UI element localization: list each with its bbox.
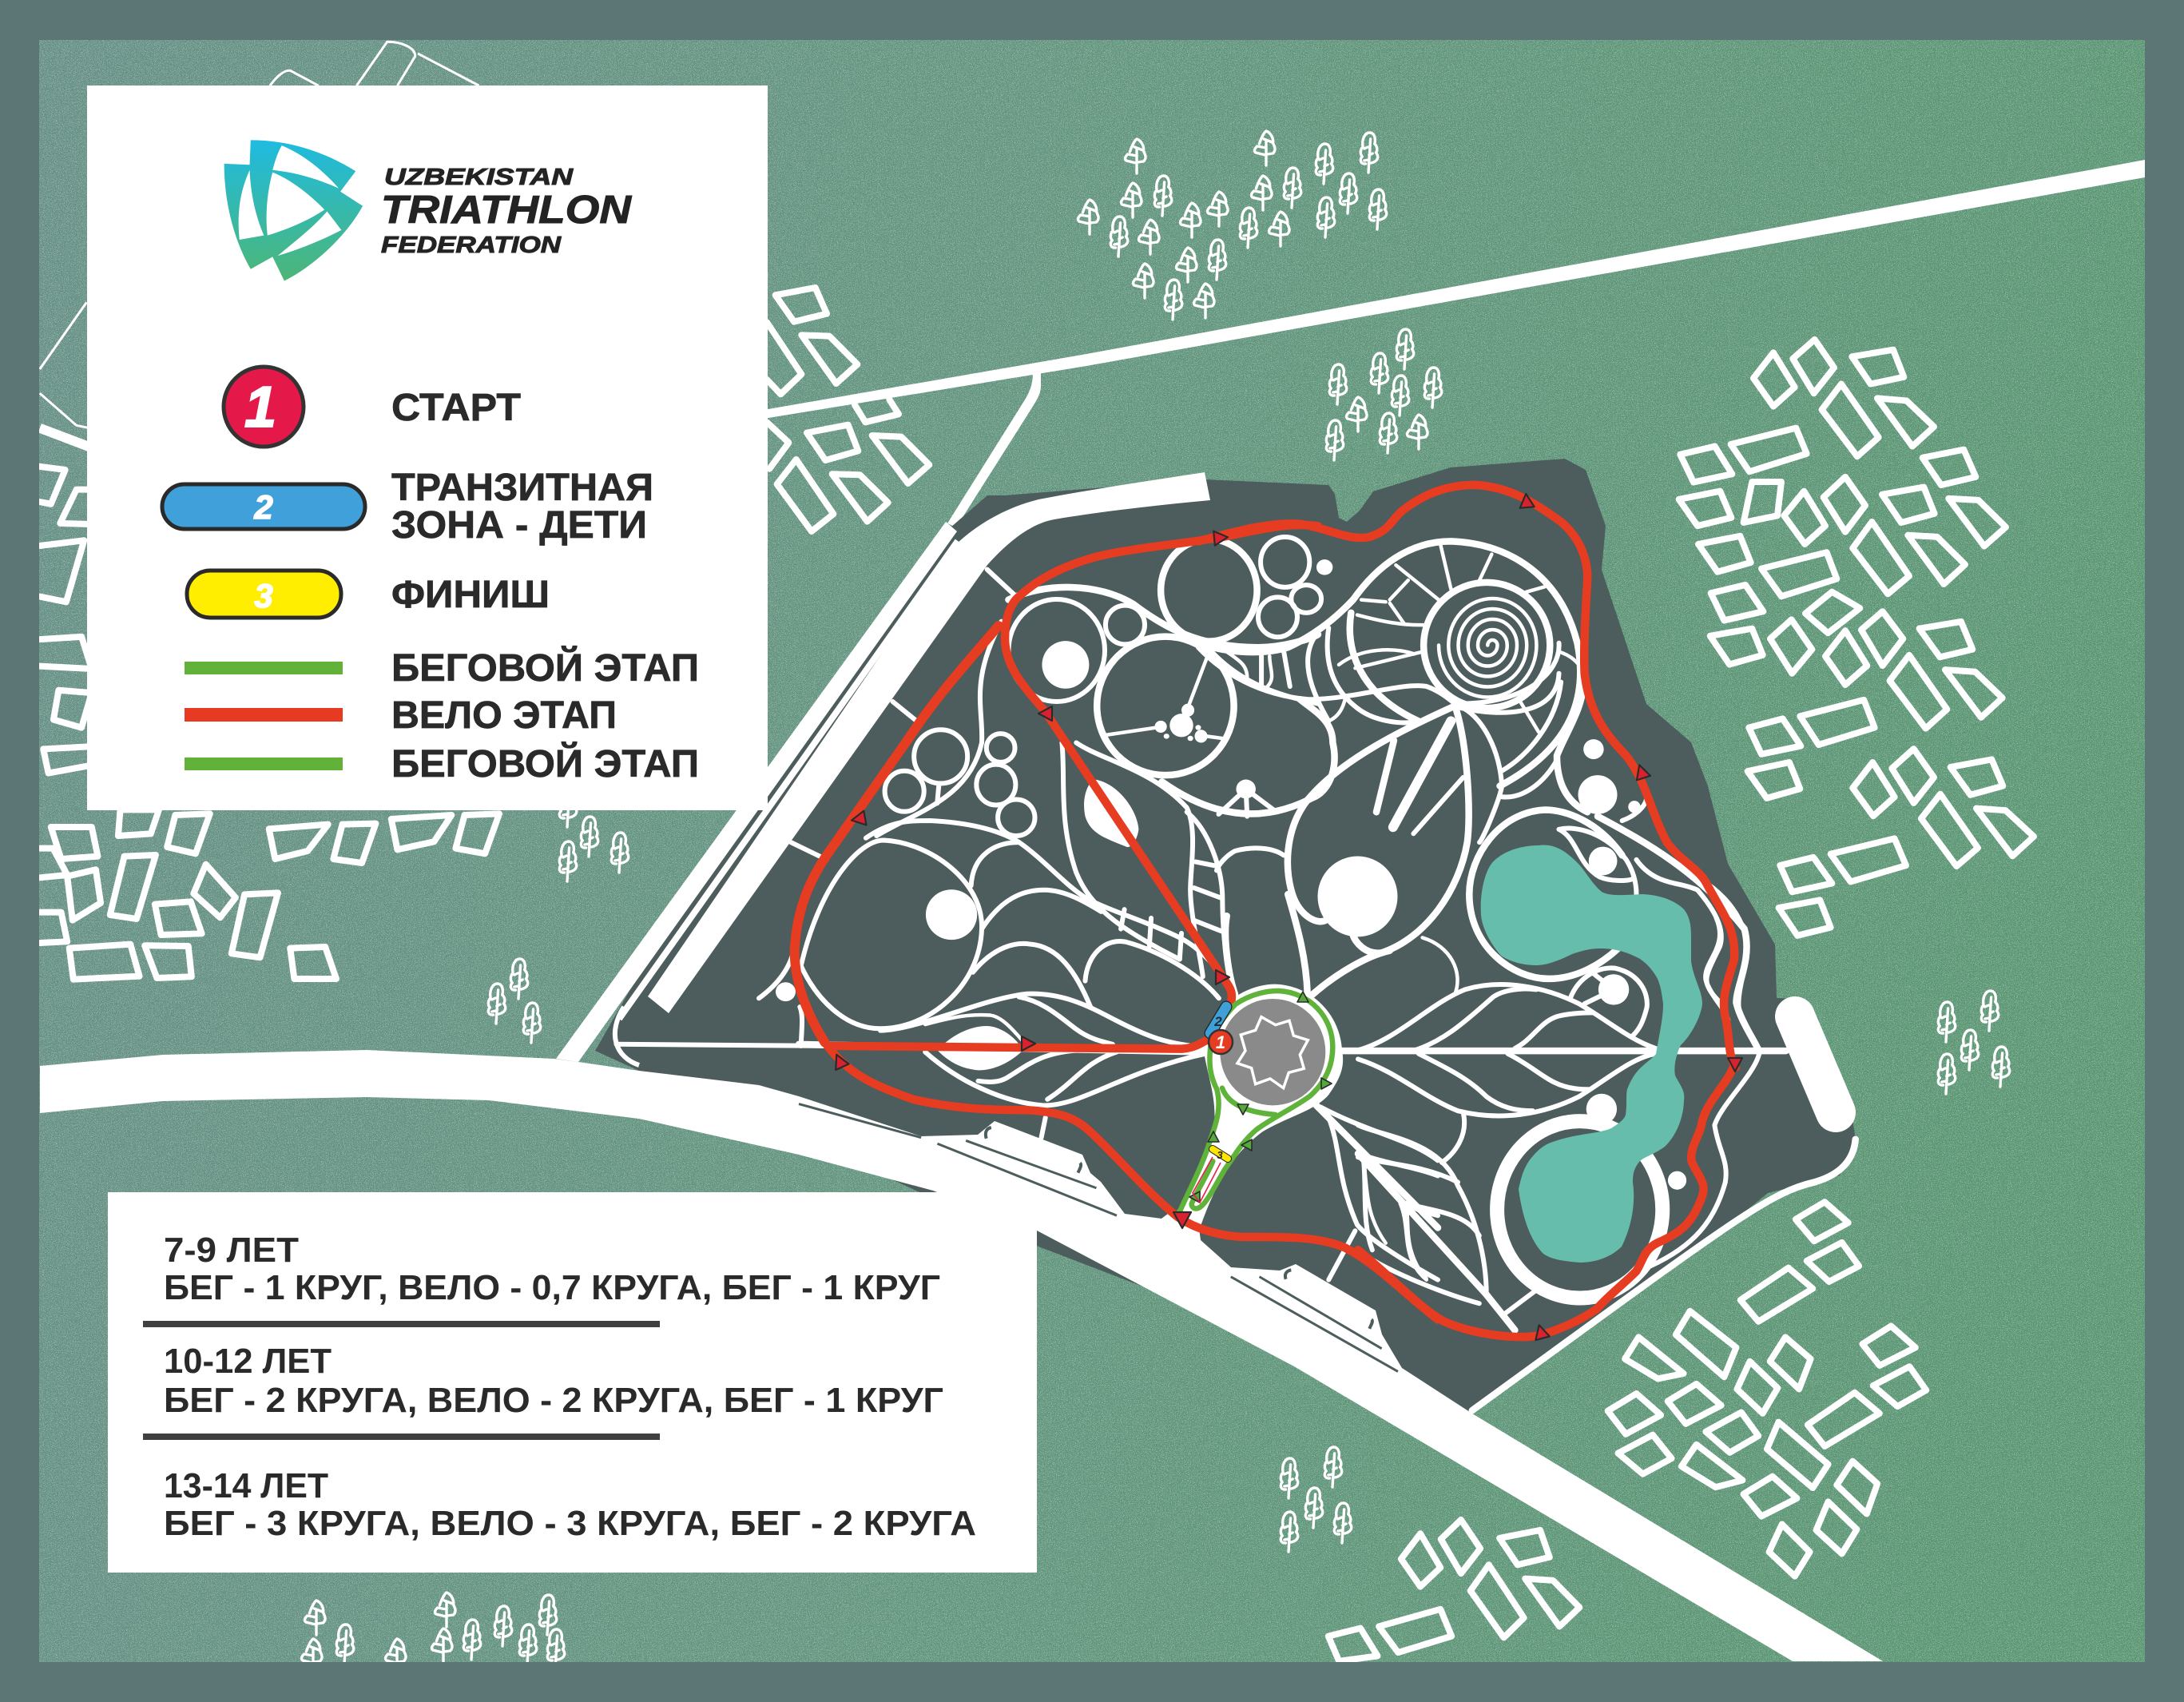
trees: north grove bbox=[1078, 131, 1387, 320]
age group 13-14: 13-14 ЛЕТ bbox=[164, 1466, 328, 1505]
logo wordmark: FEDERATION bbox=[381, 233, 562, 258]
road: eastern capsule road bbox=[1795, 1016, 1836, 1112]
legend row: transition zone: 2 bbox=[253, 488, 273, 526]
road: main southern highway bbox=[40, 1050, 1883, 1661]
logo wordmark: TRIATHLON bbox=[381, 189, 633, 232]
road: northern highway bbox=[759, 160, 2145, 527]
panel: age groups bbox=[108, 1192, 1037, 1573]
legend row: running stage 2: БЕГОВОЙ ЭТАП bbox=[391, 742, 699, 785]
legend row: cycling stage bbox=[185, 694, 617, 737]
marker 2: transition zone on map bbox=[1210, 1007, 1226, 1033]
age group 10-12: БЕГ - 2 КРУГА, ВЕЛО - 2 КРУГА, БЕГ - 1 КРУГ bbox=[164, 1381, 943, 1420]
park paths: south-west leaf and south sector bbox=[799, 994, 1438, 1280]
marker 3: finish on map bbox=[1193, 1149, 1228, 1203]
buildings: south-east clusters bbox=[1328, 1202, 1926, 1661]
route: cycling stage (red) bbox=[795, 485, 1735, 1337]
route direction arrows: green bbox=[1189, 992, 1332, 1203]
logo wordmark bbox=[381, 165, 633, 258]
trees: west grove bbox=[488, 787, 629, 1043]
buildings: north cluster near road bbox=[767, 288, 929, 531]
marker 3: finish on map: 3 bbox=[1217, 1149, 1223, 1161]
route: running stage (green) bbox=[1180, 991, 1332, 1212]
surrounding street thin lines bbox=[40, 42, 479, 447]
age group 13-14: БЕГ - 3 КРУГА, ВЕЛО - 3 КРУГА, БЕГ - 2 КРУГА bbox=[164, 1504, 976, 1543]
age group 7-9: БЕГ - 1 КРУГ, ВЕЛО - 0,7 КРУГА, БЕГ - 1 КРУГ bbox=[164, 1268, 940, 1307]
legend row: finish: ФИНИШ bbox=[391, 574, 550, 616]
legend row: start: 1 bbox=[244, 376, 276, 439]
park paths: north-east sector with spiral bbox=[1198, 537, 1759, 1050]
lake bbox=[1481, 845, 1702, 1263]
marker 1: start on map: 1 bbox=[1216, 1032, 1225, 1052]
marker 2: transition zone on map: 2 bbox=[1213, 1014, 1222, 1029]
central plaza: white teardrop road bbox=[1174, 984, 1343, 1225]
logo wordmark: UZBEKISTAN bbox=[384, 165, 574, 190]
route direction arrows: red bbox=[830, 493, 1742, 1340]
legend row: transition zone: ЗОНА - ДЕТИ bbox=[391, 504, 647, 547]
marker 1: start on map bbox=[1209, 1030, 1233, 1054]
legend row: start bbox=[224, 367, 521, 447]
age group 7-9: 7-9 ЛЕТ bbox=[164, 1231, 299, 1270]
park corner outline bbox=[615, 1007, 639, 1065]
trees: south grove bbox=[1281, 1447, 1352, 1552]
park paths: north-west sector bbox=[616, 539, 1318, 1046]
legend row: cycling stage: ВЕЛО ЭТАП bbox=[391, 694, 617, 737]
central plaza: grey circle with star bbox=[1220, 999, 1325, 1105]
legend row: running stage: БЕГОВОЙ ЭТАП bbox=[391, 646, 699, 690]
age group 7-9 bbox=[164, 1231, 940, 1307]
trees: central grove bbox=[1326, 329, 1442, 460]
trees: bottom grove bbox=[301, 1593, 565, 1673]
legend row: finish bbox=[187, 571, 550, 618]
park: dark ground bbox=[595, 459, 1856, 1413]
buildings: east cluster bbox=[1679, 340, 2034, 936]
legend row: finish: 3 bbox=[254, 577, 273, 614]
age group 13-14 bbox=[164, 1466, 976, 1543]
road: western boulevard bbox=[556, 472, 1210, 1062]
age group 10-12: 10-12 ЛЕТ bbox=[164, 1342, 332, 1381]
panel: legend bbox=[87, 85, 768, 810]
legend row: start: СТАРТ bbox=[391, 387, 521, 429]
legend row: transition zone: ТРАНЗИТНАЯ bbox=[391, 467, 653, 509]
trees: east grove bbox=[1938, 991, 2010, 1094]
legend row: running stage bbox=[185, 646, 699, 690]
legend row: transition zone bbox=[162, 467, 653, 547]
buildings: west cluster bbox=[40, 809, 499, 980]
park paths: eastern leaf and lake ring bbox=[1251, 879, 1856, 1410]
legend row: running stage 2 bbox=[185, 742, 699, 785]
age group 10-12 bbox=[164, 1342, 943, 1420]
logo emblem bbox=[224, 140, 363, 281]
buildings: left edge beside legend bbox=[40, 467, 97, 773]
